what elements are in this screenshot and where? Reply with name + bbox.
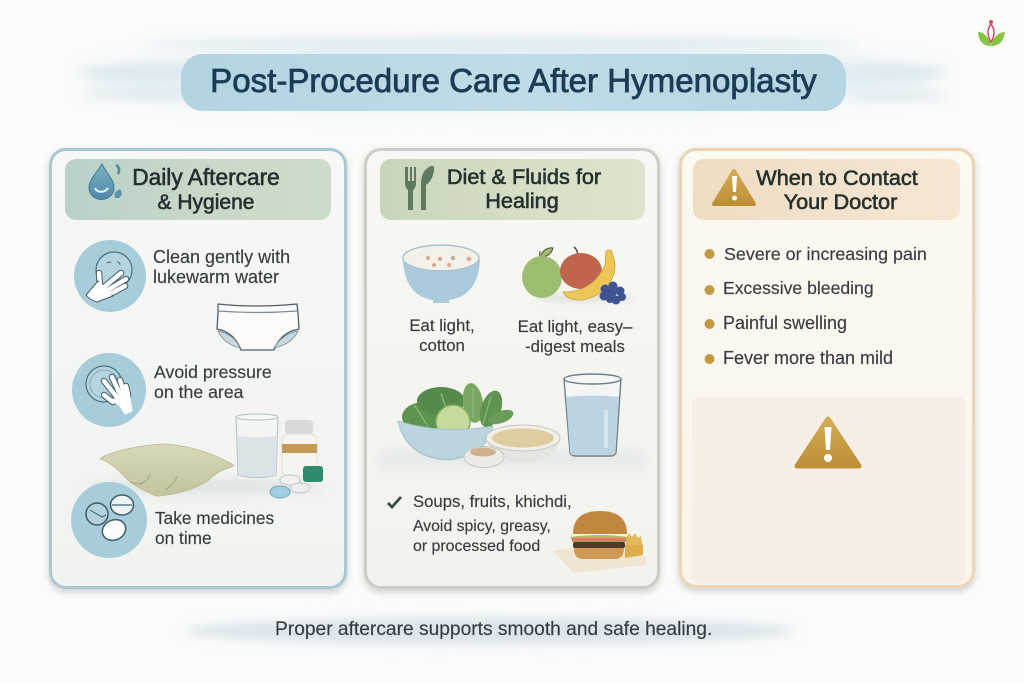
- heading text: daily aftercare: [132, 164, 280, 214]
- list: warning signs: Excessive bleeding: [723, 278, 874, 298]
- illustration: water glass large: [564, 374, 621, 456]
- text: clean gently: Clean gently with: [153, 247, 290, 267]
- footer text: Proper aftercare supports smooth and safe healing.: [275, 619, 712, 640]
- illustration: fruit: [522, 247, 635, 304]
- icon: clean gently: [74, 240, 146, 312]
- illustration: cereal bowl: [403, 245, 480, 303]
- list: warning signs: Painful swelling: [723, 313, 847, 333]
- icon: warning large: [797, 419, 859, 466]
- icon: avoid pressure: [72, 353, 146, 427]
- text: eat light cotton: [409, 316, 475, 355]
- text: eat light easy digest: [518, 317, 632, 356]
- panel: daily aftercare: [49, 148, 347, 589]
- heading text: diet and fluids: Diet & Fluids for: [447, 164, 601, 189]
- heading text: daily aftercare: Daily Aftercare: [132, 164, 280, 190]
- text: clean gently: lukewarm water: [153, 267, 279, 287]
- text: take medicines: on time: [155, 528, 212, 548]
- icon: fork and knife: [405, 166, 434, 210]
- title: Post-Procedure Care After Hymenoplasty: [210, 63, 817, 100]
- heading text: contact doctor: Your Doctor: [784, 189, 897, 214]
- text: avoid pressure: [154, 362, 272, 402]
- icon: warning header: [714, 171, 754, 204]
- icon: check mark: [388, 497, 401, 507]
- panel: when to contact your doctor: [679, 148, 975, 588]
- illustration: salad bowl: [398, 382, 515, 460]
- text: eat light cotton: Eat light,: [409, 316, 475, 335]
- panel: diet and fluids: [364, 148, 660, 589]
- illustration: medicine bottle: [282, 420, 317, 476]
- heading: contact doctor: [693, 159, 960, 220]
- list: warning signs: Fever more than mild: [723, 348, 893, 368]
- heading text: contact doctor: When to Contact: [756, 165, 918, 190]
- heading text: daily aftercare: & Hygiene: [158, 191, 254, 214]
- illustration: water glass: [236, 414, 278, 478]
- warning panel: [692, 397, 965, 583]
- heading text: diet and fluids: Healing: [485, 188, 559, 213]
- title: [181, 54, 846, 111]
- floor shadow: left panel: [85, 480, 325, 494]
- text: soups and avoid foods: Avoid spicy, greasy,: [413, 518, 551, 535]
- text: eat light cotton: cotton: [419, 336, 465, 355]
- illustration: pillow: [100, 444, 233, 496]
- icon: medicines: [71, 482, 147, 558]
- text: soups and avoid foods: or processed food: [413, 538, 540, 555]
- heading text: diet and fluids: [447, 164, 602, 213]
- bullets: [704, 249, 714, 364]
- list: warning signs: Severe or increasing pain: [724, 244, 927, 264]
- floor shadow: middle panel: [378, 450, 646, 468]
- text: avoid pressure: Avoid pressure: [154, 362, 272, 382]
- text: soups and avoid foods: Soups, fruits, khichdi,: [413, 492, 572, 511]
- text: avoid pressure: on the area: [154, 382, 244, 402]
- list: warning signs: [723, 244, 927, 368]
- text: take medicines: [155, 508, 274, 548]
- illustration: pills: [270, 466, 323, 498]
- text: clean gently: [153, 247, 290, 287]
- text: eat light easy digest: -digest meals: [525, 337, 625, 356]
- text: take medicines: Take medicines: [155, 508, 274, 528]
- icon: water drop: [89, 164, 122, 199]
- heading: daily aftercare: [65, 159, 331, 220]
- illustration: grain bowl: [464, 425, 560, 468]
- heading text: contact doctor: [756, 165, 918, 214]
- text: eat light easy digest: Eat light, easy–: [518, 317, 632, 336]
- text: soups and avoid foods: [413, 492, 572, 555]
- illustration: burger and fries: [553, 511, 647, 573]
- icon: underwear: [217, 304, 299, 350]
- heading: diet and fluids: [380, 159, 645, 220]
